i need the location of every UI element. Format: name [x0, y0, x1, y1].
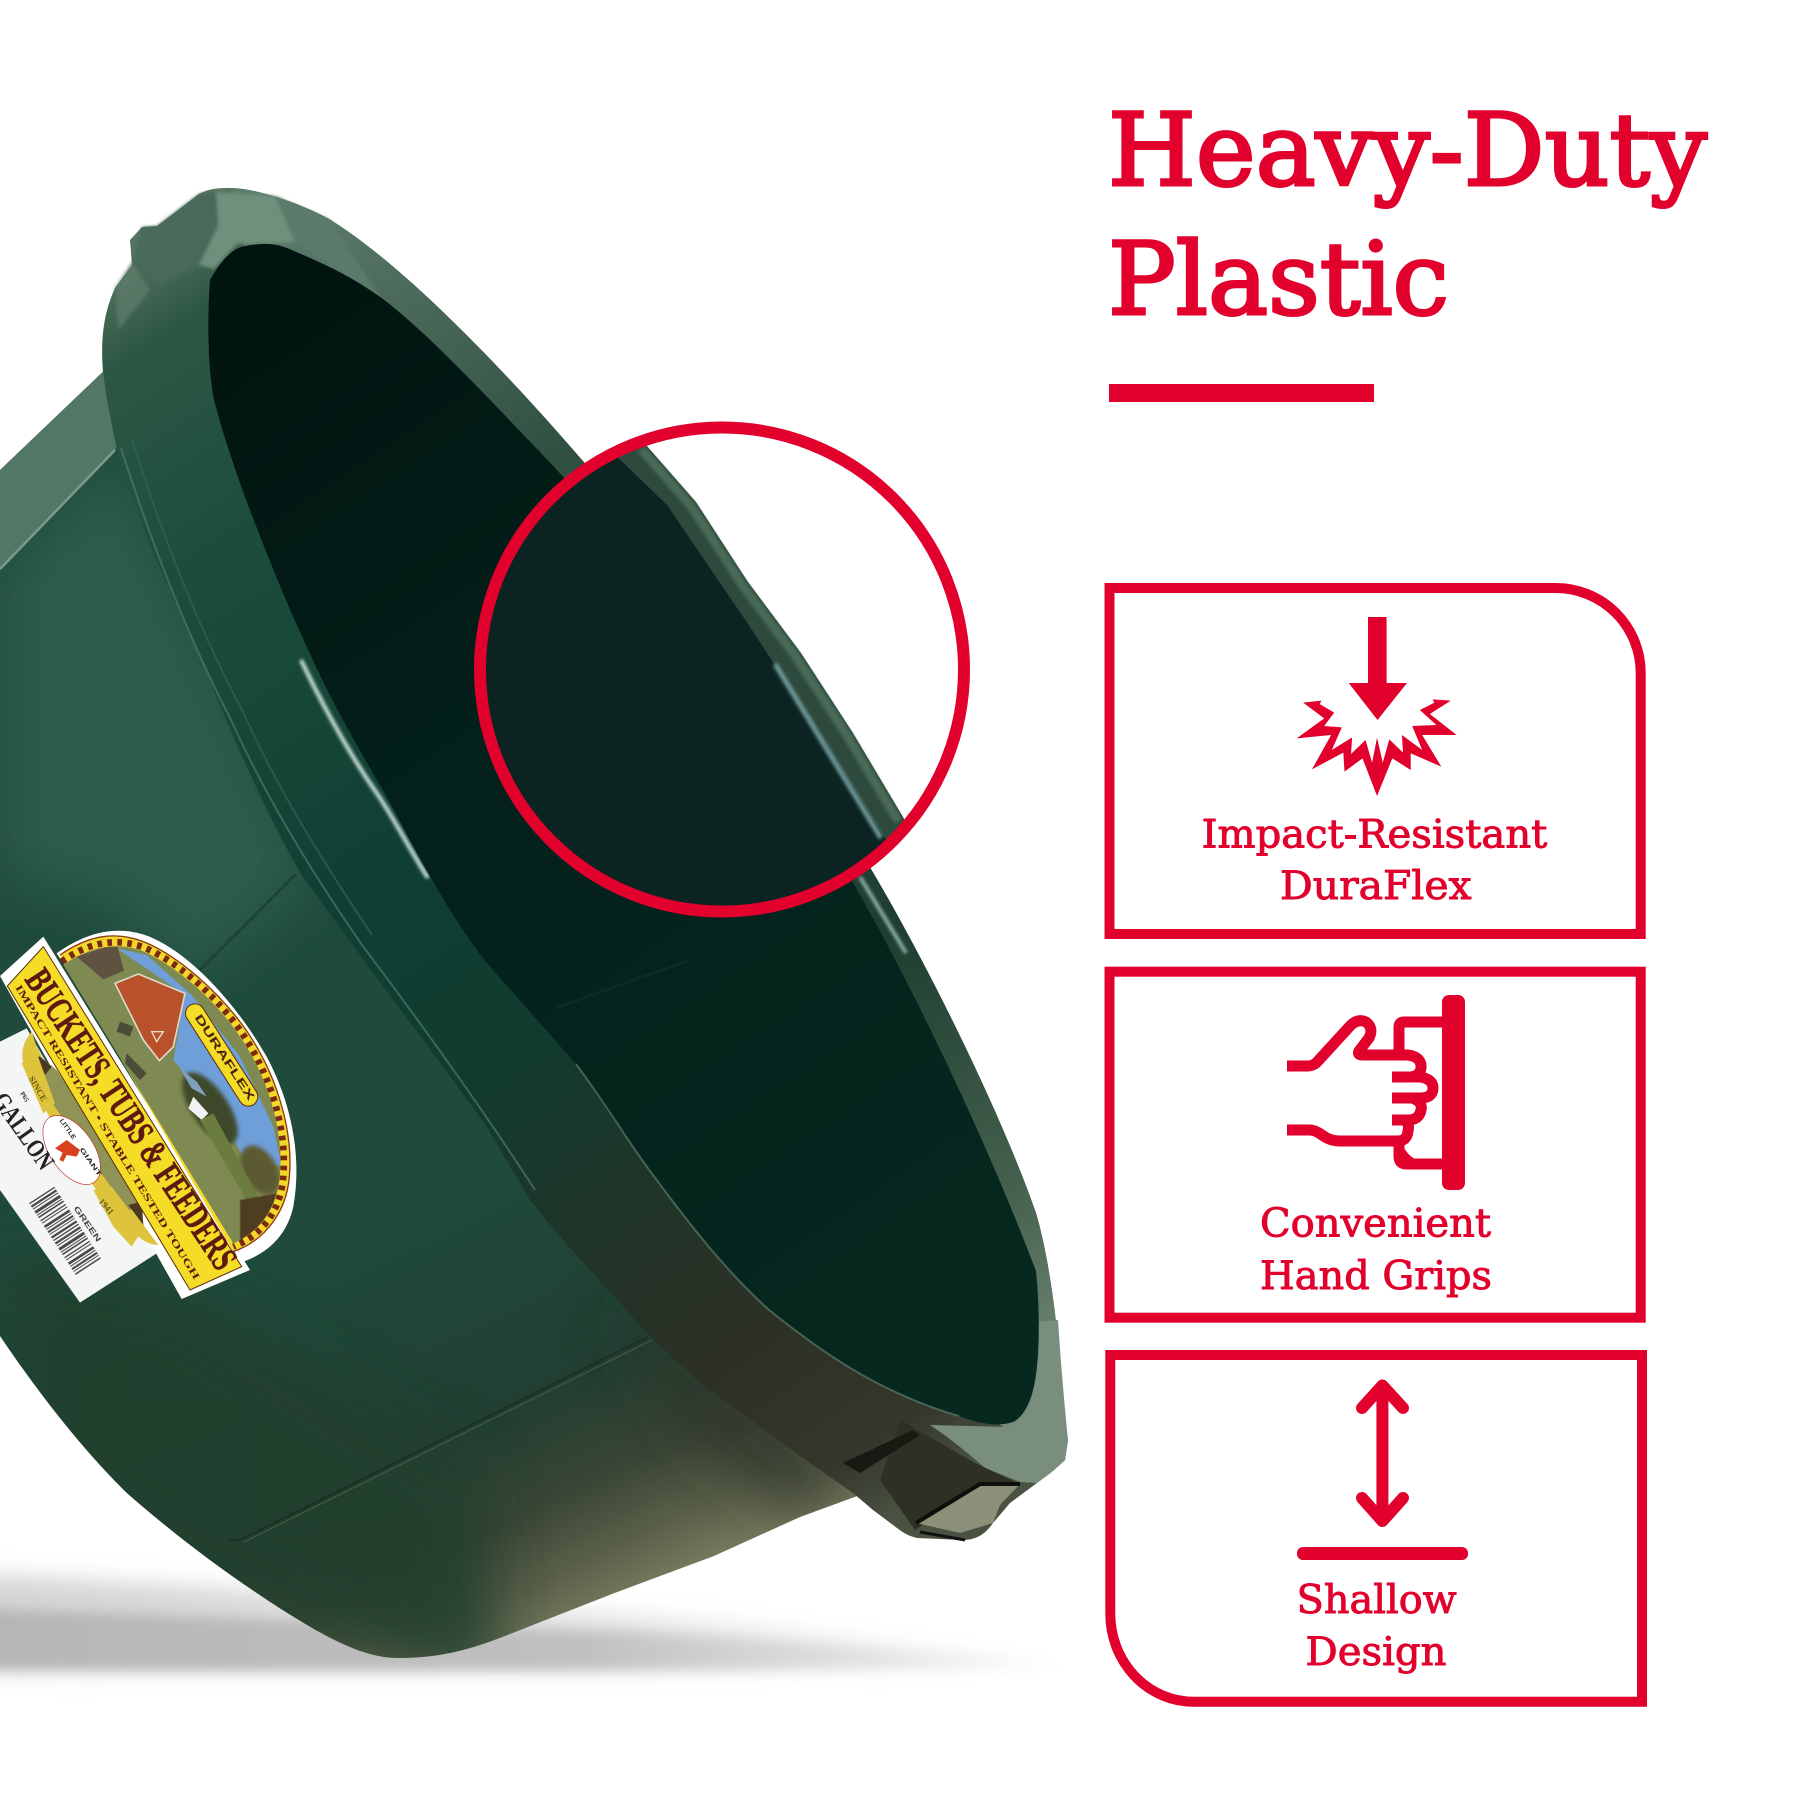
title: [1108, 92, 1708, 338]
floor shadow: [0, 1570, 1060, 1672]
label: shallow design: Shallow: [1297, 1578, 1457, 1623]
label: shallow design: Design: [1306, 1630, 1446, 1675]
white die-cut backing: [0, 931, 296, 1303]
capacity text and barcode: P65: [18, 1091, 30, 1104]
tub body: [0, 365, 860, 1700]
capacity text and barcode: [0, 1087, 103, 1267]
title rule: [1109, 384, 1374, 402]
tub interior: [208, 244, 1039, 1424]
panel: impact-resistant: [1110, 588, 1641, 934]
bottom lug: [843, 1320, 1068, 1540]
icon: hand gripping handle: [1287, 995, 1465, 1190]
yellow banner: [7, 947, 245, 1290]
panel: hand grips: [1110, 972, 1641, 1318]
scalloped oval border: [60, 936, 290, 1252]
panel: shallow design: [1110, 1355, 1642, 1702]
label: impact-resistant: DuraFlex: [1280, 864, 1472, 909]
Little Giant logo: [31, 1105, 112, 1195]
tub rim: [102, 188, 1068, 1540]
product label: [0, 931, 300, 1303]
yellow ribbon behind banner: [22, 1032, 158, 1247]
icon: impact arrow and burst: [1297, 617, 1457, 796]
title: Heavy-Duty: [1108, 92, 1708, 209]
yellow ribbon behind banner: SINCE: [27, 1074, 49, 1103]
icon: double arrow over baseline: [1297, 1386, 1468, 1560]
label: hand grips: Hand Grips: [1260, 1254, 1492, 1299]
yellow ribbon behind banner: 1941: [97, 1197, 116, 1217]
farm scene: [64, 946, 280, 1244]
DuraFlex badge: DURAFLEX: [192, 1012, 257, 1103]
top lug: [115, 192, 382, 330]
label: shallow design: [1297, 1578, 1457, 1675]
far-side rim band: [230, 188, 1068, 1460]
label: hand grips: Convenient: [1260, 1202, 1491, 1247]
capacity text and barcode: GREEN: [72, 1204, 103, 1244]
product photo: green tub: [0, 188, 1068, 1700]
molded ribs on rim: [121, 448, 535, 1190]
Little Giant logo: LITTLE: [58, 1118, 77, 1141]
label: impact-resistant: [1202, 813, 1548, 909]
magnifier lens detail: [474, 422, 970, 918]
yellow banner: IMPACT RESISTANT • STABLE TESTED TOUGH: [12, 983, 201, 1282]
DuraFlex badge: [192, 1012, 257, 1103]
Little Giant logo: GIANT: [78, 1146, 103, 1178]
title: Plastic: [1108, 221, 1449, 338]
yellow banner: BUCKETS, TUBS & FEEDERS: [16, 962, 245, 1278]
label: hand grips: [1260, 1202, 1492, 1299]
label: impact-resistant: Impact-Resistant: [1202, 813, 1548, 858]
